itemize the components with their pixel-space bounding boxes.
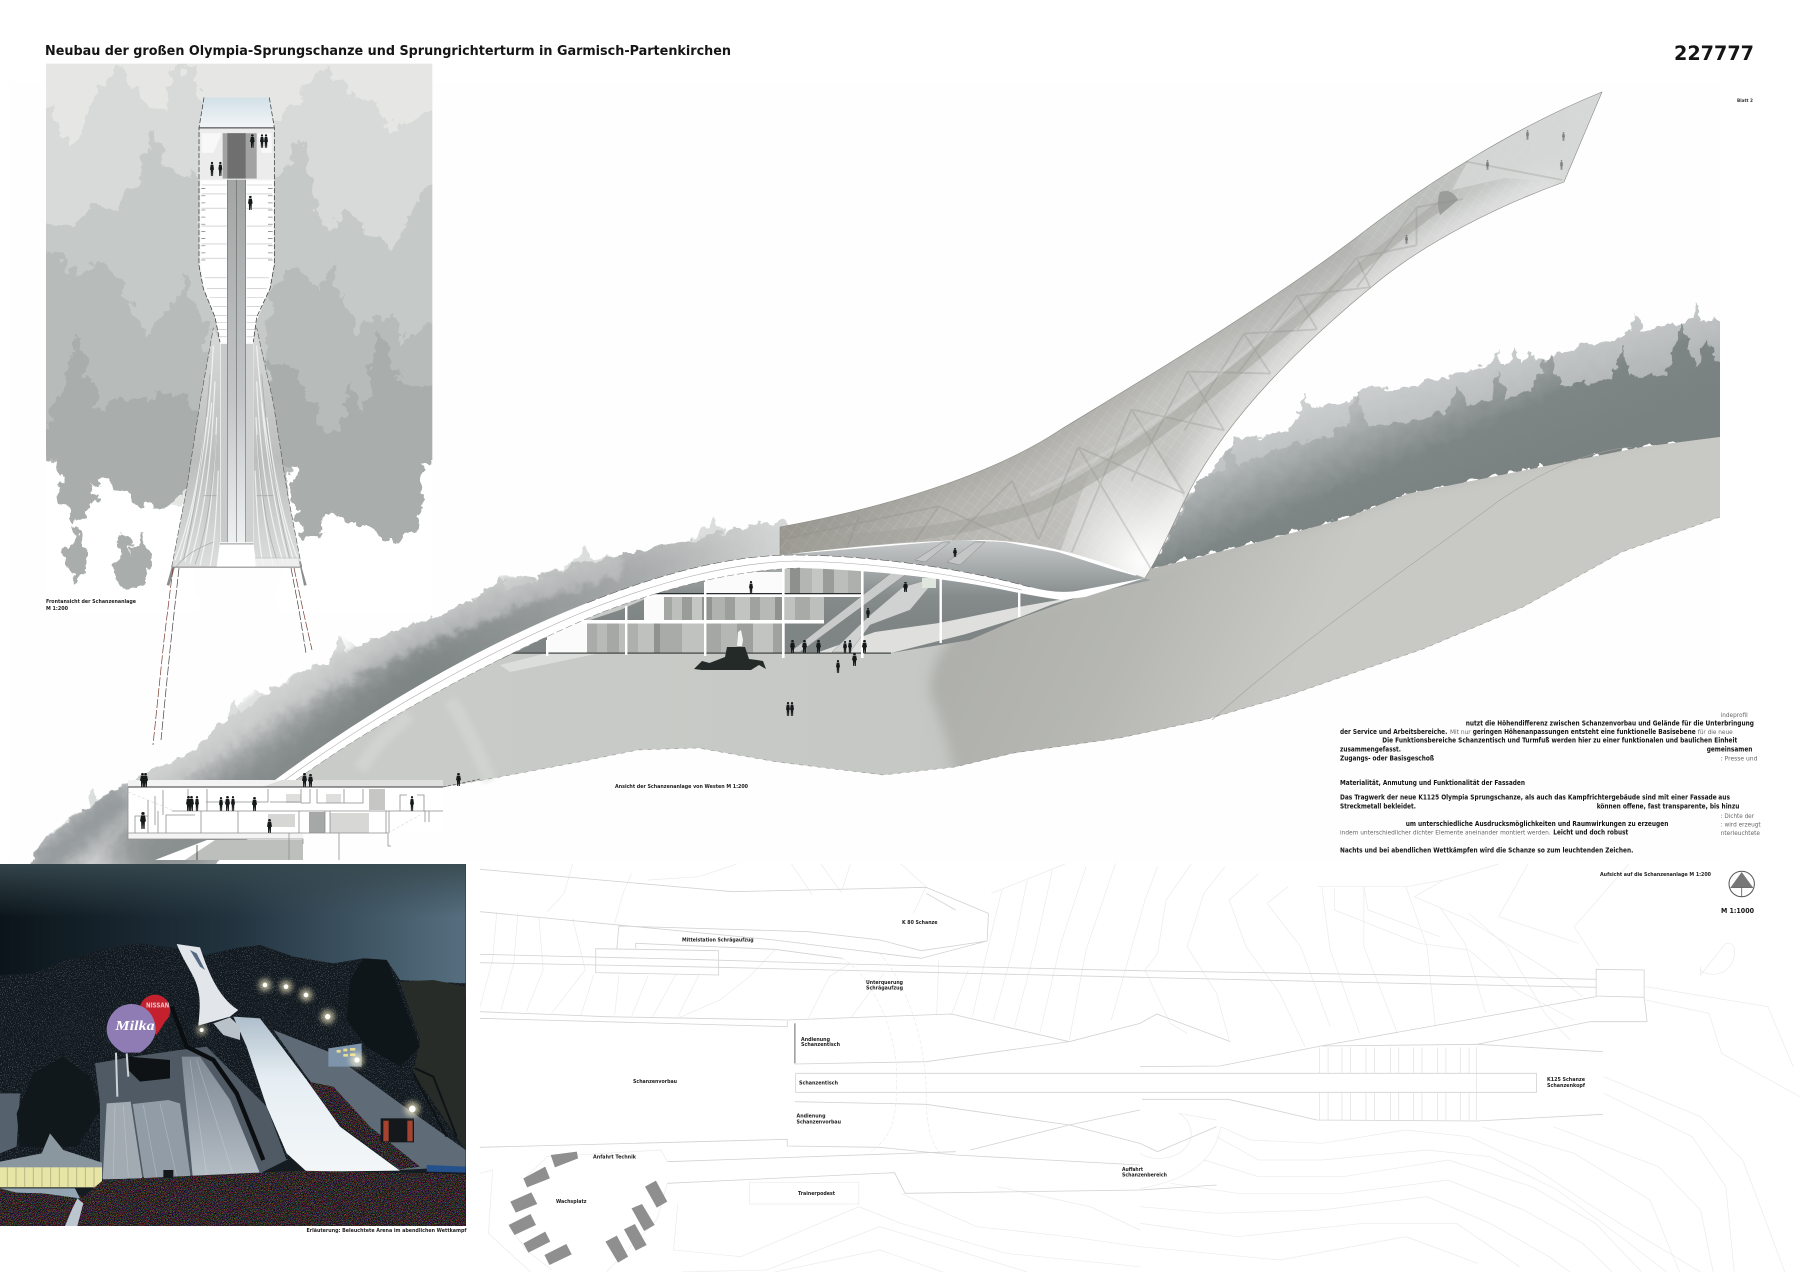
dark hill lobe	[928, 437, 1720, 768]
crane	[413, 1068, 457, 1137]
deck figures	[1405, 130, 1565, 244]
plan labels: Schanzentisch	[801, 1042, 840, 1048]
arched underpass	[842, 953, 943, 1155]
contour lines upper	[480, 863, 1800, 1097]
K80 jump outline	[480, 869, 988, 958]
Andienung wall	[794, 1023, 796, 1063]
caption: front view: Frontansicht der Schanzenanlage	[46, 599, 136, 605]
lift structure	[172, 1007, 263, 1160]
caption: front view: M 1:200	[46, 606, 68, 612]
tower base	[217, 544, 255, 567]
tower long dashed legs	[153, 568, 312, 745]
scoreboard	[381, 1118, 414, 1142]
text block: description: aus	[1718, 793, 1730, 801]
text block: description: für die neue	[1698, 728, 1733, 736]
plan labels: Schanzenkopf	[1547, 1083, 1586, 1089]
contour lines lower	[480, 1077, 1785, 1272]
right forest behind ramp	[1151, 300, 1740, 569]
top floor	[705, 568, 862, 593]
title: Neubau der großen Olympia-Sprungschanze und Sprungrichterturm in Garmisch-Partenkirchen	[45, 44, 731, 59]
scale label: M 1:1000	[1721, 906, 1754, 915]
snow wedge under ramp	[816, 596, 1081, 653]
Trainerpodest box	[749, 1183, 859, 1204]
ground floor	[547, 623, 785, 653]
plan labels: Schanzenvorbau	[633, 1079, 677, 1085]
text block: description: indem unterschiedlicher dichter Elemente aneinander montiert werden.	[1340, 829, 1551, 837]
plan labels	[556, 920, 1586, 1205]
balloon Milka: Milka	[114, 1019, 155, 1034]
text block: description: Materialität, Anmutung und Funktionalität der Fassaden	[1340, 779, 1525, 787]
service tube	[790, 195, 1452, 545]
section figures	[140, 773, 461, 833]
plan labels: Unterquerung	[866, 980, 903, 986]
lit tent	[0, 1133, 102, 1187]
plan labels: K 80 Schanze	[902, 920, 938, 926]
plan labels: Schanzenvorbau	[796, 1120, 841, 1126]
snow groomer	[694, 647, 766, 670]
K125 walls	[1140, 997, 1647, 1121]
lift end box	[1596, 969, 1644, 997]
snow slope left	[95, 1047, 287, 1178]
access roads	[667, 1152, 1217, 1193]
waxing containers	[509, 1152, 667, 1265]
dark hollow	[128, 1057, 170, 1082]
figures	[749, 548, 957, 716]
text block: description	[1340, 711, 1761, 854]
text block: description: gemeinsamen	[1707, 746, 1753, 754]
text block: description: zusammengefasst.	[1340, 746, 1401, 754]
spectators	[0, 1168, 466, 1226]
plan labels: Schanzentisch	[799, 1081, 838, 1087]
competition number: 227777	[1674, 42, 1754, 65]
snow patch left	[0, 1188, 80, 1198]
text block: description: nutzt die Höhendifferenz zwischen Schanzenvorbau und Gelände für die Unterbringung	[1466, 719, 1754, 727]
ramp outline	[780, 92, 1602, 578]
lattice braces	[780, 161, 1562, 569]
left wing	[172, 328, 220, 567]
blue banner	[427, 1165, 466, 1173]
dark spruce trees	[347, 958, 420, 1067]
deck slab	[128, 779, 480, 787]
text block: description: indeprofil	[1721, 711, 1748, 719]
plan labels: Trainerpodest	[798, 1191, 835, 1197]
forest silhouette	[0, 943, 466, 1160]
arch bridge	[275, 555, 1145, 780]
plan labels: Andienung	[796, 1114, 826, 1120]
main jump outline	[480, 1012, 1230, 1165]
panel: west elevation	[0, 85, 1760, 875]
ski jump ramp	[770, 85, 1610, 585]
plan labels: Andienung	[801, 1037, 830, 1043]
text block: description: Nachts und bei abendlichen Wettkämpfen wird die Schanze so zum leuchtenden Zeichen.	[1340, 846, 1633, 854]
caption: photo: Erläuterung: Beleuchtete Arena im abendlichen Wettkampf	[306, 1228, 467, 1234]
text block: description: Mit nur	[1450, 728, 1471, 736]
plan labels: K125 Schanze	[1547, 1077, 1585, 1083]
night sky	[0, 864, 466, 997]
walkway	[65, 1198, 83, 1226]
floodlights	[197, 979, 420, 1116]
inclined lift rails	[480, 954, 1596, 987]
plan labels: Schrägaufzug	[866, 986, 903, 992]
panel: site plan	[480, 863, 1800, 1272]
panel: section through lower deck	[128, 773, 480, 860]
balloon mast	[116, 1053, 128, 1097]
sky top haze	[0, 864, 466, 997]
text block: description: Streckmetall bekleidet.	[1340, 802, 1416, 810]
plan labels: Auffahrt	[1122, 1167, 1143, 1173]
left tree	[17, 1057, 100, 1147]
plan labels: Wachsplatz	[556, 1199, 586, 1205]
ski tower glowing	[177, 944, 238, 1026]
caption: west elevation: Ansicht der Schanzenanlage von Westen M 1:200	[615, 784, 748, 790]
text block: description: können offene, fast transparente, bis hinzu	[1597, 802, 1740, 810]
caption: site plan: Aufsicht auf die Schanzenanlage M 1:200	[1600, 872, 1711, 878]
exhaust plume	[737, 630, 743, 646]
tower shaft	[199, 128, 274, 544]
text block: description: der Service und Arbeitsbereiche.	[1340, 728, 1447, 736]
forest snow speckle	[0, 940, 466, 1160]
ground and hill	[290, 425, 1760, 787]
section interior	[128, 787, 443, 860]
small ramp 2	[133, 1100, 191, 1179]
ski tracks	[113, 1060, 233, 1177]
text block: description: Das Tragwerk der neue K1125 Olympia Sprungschanze, als auch das Kampfrichtergebäude sind mit einer Fassade	[1340, 793, 1717, 801]
text block: description: nterleuchtete	[1721, 829, 1760, 837]
text block: description: Zugangs- oder Basisgeschoß	[1340, 754, 1434, 762]
panel: night photo of arena	[0, 864, 466, 1226]
building facade	[500, 568, 891, 654]
building on slope	[328, 1043, 362, 1067]
text block: description: : wird erzeugt	[1721, 820, 1761, 828]
left field	[0, 1093, 20, 1153]
columns	[546, 568, 1020, 658]
plan labels: Anfahrt Technik	[593, 1155, 637, 1161]
tower cap and judges floor	[167, 97, 307, 586]
Schanzentisch strip	[796, 1073, 1536, 1092]
left forest behind arch	[0, 520, 800, 875]
text block: description: : Presse und	[1721, 754, 1757, 762]
text block: description: um unterschiedliche Ausdrucksmöglichkeiten und Raumwirkungen zu erzeugen	[1406, 820, 1669, 828]
snow wedge left	[500, 653, 600, 672]
snow slope right	[273, 1030, 466, 1170]
large jump slope	[233, 1017, 400, 1172]
text block: description: Leicht und doch robust	[1553, 829, 1628, 837]
small ramp 3	[182, 1057, 260, 1177]
escalators	[790, 542, 985, 652]
lower arch below deck	[155, 840, 303, 860]
stair ticks	[1320, 1047, 1477, 1120]
crowd on slope	[308, 1082, 420, 1170]
balloon Milka	[107, 1004, 156, 1053]
icon: north arrow	[1729, 871, 1754, 897]
small ramp 1	[103, 1102, 142, 1179]
text block: description: geringen Höhenanpassungen entsteht eine funktionelle Basisebene	[1473, 728, 1696, 736]
panel: front view of tower with forest	[46, 64, 432, 590]
plan labels: Schanzenbereich	[1122, 1173, 1167, 1179]
middle station box	[596, 949, 719, 975]
sheet label: Blatt 2	[1737, 98, 1753, 104]
plan labels: Mittelstation Schrägaufzug	[682, 938, 754, 944]
floor slabs	[500, 593, 891, 654]
viewing deck	[1452, 92, 1602, 190]
backdrop under arch	[500, 540, 1151, 660]
forest backdrop	[46, 64, 432, 590]
text block: description: : Dichte der	[1721, 812, 1754, 820]
second floor	[644, 597, 824, 620]
sign	[163, 1170, 173, 1178]
caption: front view	[46, 599, 136, 612]
text block: description: Die Funktionsbereiche Schanzentisch und Turmfuß werden hier zu einer funktionalen und baulichen Einheit	[1382, 737, 1737, 745]
balloon red	[140, 995, 170, 1035]
dark slope right	[400, 980, 466, 1150]
balloon red: NISSAN	[146, 1001, 169, 1009]
tower base	[213, 1017, 240, 1040]
tower figures	[210, 134, 268, 210]
right wing	[253, 328, 302, 567]
